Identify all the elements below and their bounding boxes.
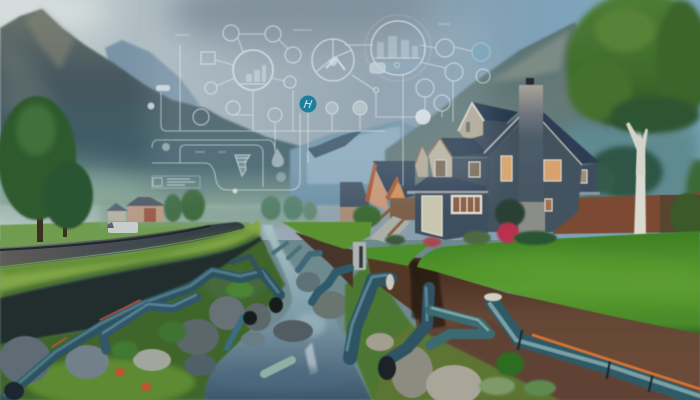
drainage pipes left (4, 243, 350, 400)
connector lines (152, 34, 472, 190)
dark soil bank left (0, 236, 266, 346)
translucent data overlay haze (150, 20, 490, 190)
orange cable right (533, 335, 700, 389)
side extension (575, 165, 600, 195)
small green bushes and flowers (112, 282, 254, 391)
node circle icons (193, 25, 490, 125)
pipe outlets (243, 297, 283, 325)
rocky bank right foreground (366, 320, 700, 400)
far-bank lawns and cut soil (282, 222, 372, 288)
roadside grass slope (0, 220, 261, 298)
rocks in stream (0, 272, 348, 384)
neighbouring houses (340, 161, 416, 222)
dashboard card (152, 176, 200, 188)
porch stairs (370, 208, 410, 244)
village houses far left (106, 197, 166, 222)
cross pipe in rocks (227, 317, 243, 348)
small nodes left (148, 85, 286, 194)
right bank moss (345, 262, 425, 400)
pill icon (370, 63, 385, 73)
tree: birch right (566, 0, 700, 237)
tree: left (0, 96, 93, 242)
highlighted blue node (472, 43, 490, 61)
delivery van (107, 222, 138, 233)
wooden fence (553, 192, 700, 237)
green hillside (0, 240, 285, 400)
orange cable left (52, 300, 140, 347)
small meta bars (175, 24, 450, 152)
infographic overlay: network diagram (148, 15, 490, 194)
distant mountains left (0, 9, 318, 225)
roof right (543, 112, 599, 164)
branch pipe left (103, 295, 197, 350)
chimney (519, 85, 543, 203)
distant valley haze panel (290, 120, 420, 205)
upper stream pipes (273, 243, 350, 302)
road (0, 222, 244, 268)
trees middle distance (164, 189, 317, 222)
main right pipe (484, 293, 700, 400)
chart circle (233, 50, 273, 90)
pipe segment in water (264, 360, 292, 374)
shrubs around house (353, 199, 557, 247)
white active node (416, 110, 430, 124)
house body (488, 123, 582, 232)
small gables (415, 145, 428, 177)
lawn and soil bank right (365, 231, 700, 400)
porch roof (407, 177, 487, 192)
elbow pipe (430, 308, 490, 345)
windows (501, 156, 512, 181)
water drop icon (272, 148, 284, 167)
stream (205, 225, 372, 400)
analysis circle (312, 39, 354, 81)
vertical pipe into water (378, 288, 429, 380)
sky (0, 0, 700, 240)
main house (407, 78, 600, 240)
main left pipe (4, 270, 280, 400)
city data circle (365, 15, 431, 81)
drainage pipes right (347, 274, 700, 400)
garage wing (415, 193, 488, 240)
background tree line right (572, 146, 700, 220)
tornado funnel icon (235, 155, 250, 176)
gooseneck pipe (347, 274, 394, 358)
left roof slope (450, 113, 522, 157)
mountain right (385, 22, 700, 210)
upper pipe (232, 256, 262, 276)
far left lawn (0, 200, 320, 248)
teal highlight node (300, 96, 316, 112)
upper dormer (452, 102, 518, 150)
